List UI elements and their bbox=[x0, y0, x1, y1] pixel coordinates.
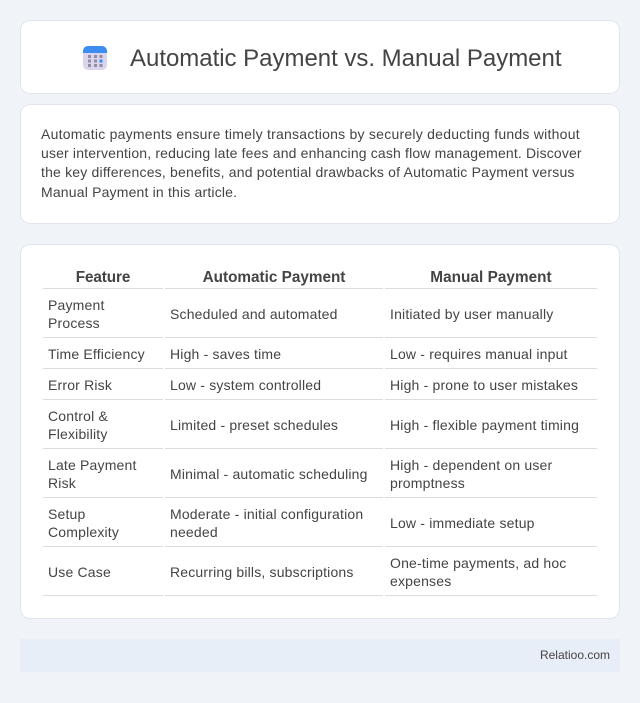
row: setup complexity: Setup bbox=[48, 506, 86, 522]
row: use case: Use Case bbox=[48, 564, 111, 580]
intro text: Automatic payments ensure timely transactions by securely deducting funds without bbox=[41, 126, 580, 142]
column headers bbox=[76, 269, 552, 286]
row: payment process bbox=[48, 297, 554, 331]
row: error risk: Error Risk bbox=[48, 377, 112, 393]
row: control and flexibility: Flexibility bbox=[48, 426, 108, 442]
row: use case bbox=[48, 555, 566, 589]
row: error risk: Low - system controlled bbox=[170, 377, 321, 393]
intro text: user intervention, reducing late fees and enhancing cash flow management. Discover bbox=[41, 145, 582, 161]
comparison table bbox=[43, 269, 597, 596]
footer bar bbox=[20, 639, 620, 672]
row: payment process: Payment bbox=[48, 297, 105, 313]
row: error risk: High - prone to user mistakes bbox=[390, 377, 578, 393]
column headers: Feature bbox=[76, 269, 130, 286]
row: use case: expenses bbox=[390, 573, 451, 589]
row: payment process: Initiated by user manually bbox=[390, 306, 553, 322]
row: time efficiency: Low - requires manual input bbox=[390, 346, 568, 362]
row: time efficiency: High - saves time bbox=[170, 346, 281, 362]
row: time efficiency bbox=[48, 346, 568, 362]
intro text bbox=[41, 126, 582, 200]
row: setup complexity: Moderate - initial configuration bbox=[170, 506, 363, 522]
row: control and flexibility: High - flexible payment timing bbox=[390, 417, 579, 433]
row: late payment risk: Risk bbox=[48, 475, 76, 491]
row: control and flexibility bbox=[48, 408, 579, 442]
title: Automatic Payment vs. Manual Payment bbox=[130, 45, 561, 72]
row: use case: Recurring bills, subscriptions bbox=[170, 564, 354, 580]
panel: header bbox=[20, 20, 620, 94]
row: setup complexity bbox=[48, 506, 535, 540]
row: error risk bbox=[48, 377, 578, 393]
row: late payment risk bbox=[48, 457, 552, 491]
column headers: Manual Payment bbox=[430, 269, 552, 286]
row: payment process: Process bbox=[48, 315, 100, 331]
row: payment process: Scheduled and automated bbox=[170, 306, 338, 322]
panel: intro bbox=[20, 104, 620, 224]
row: control and flexibility: Control & bbox=[48, 408, 108, 424]
row: control and flexibility: Limited - preset schedules bbox=[170, 417, 338, 433]
row: setup complexity: Complexity bbox=[48, 524, 119, 540]
row: late payment risk: High - dependent on user bbox=[390, 457, 552, 473]
row: time efficiency: Time Efficiency bbox=[48, 346, 145, 362]
row: late payment risk: Minimal - automatic scheduling bbox=[170, 466, 368, 482]
row: use case: One-time payments, ad hoc bbox=[390, 555, 566, 571]
row: setup complexity: needed bbox=[170, 524, 218, 540]
icon: calendar bbox=[83, 46, 107, 70]
row: late payment risk: promptness bbox=[390, 475, 465, 491]
row: late payment risk: Late Payment bbox=[48, 457, 137, 473]
intro text: Manual Payment in this article. bbox=[41, 184, 237, 200]
column headers: Automatic Payment bbox=[203, 269, 345, 286]
panel: comparison table bbox=[20, 244, 620, 619]
footer credit: Relatioo.com bbox=[540, 648, 610, 662]
row: setup complexity: Low - immediate setup bbox=[390, 515, 535, 531]
intro text: the key differences, benefits, and potential drawbacks of Automatic Payment versus bbox=[41, 164, 575, 180]
